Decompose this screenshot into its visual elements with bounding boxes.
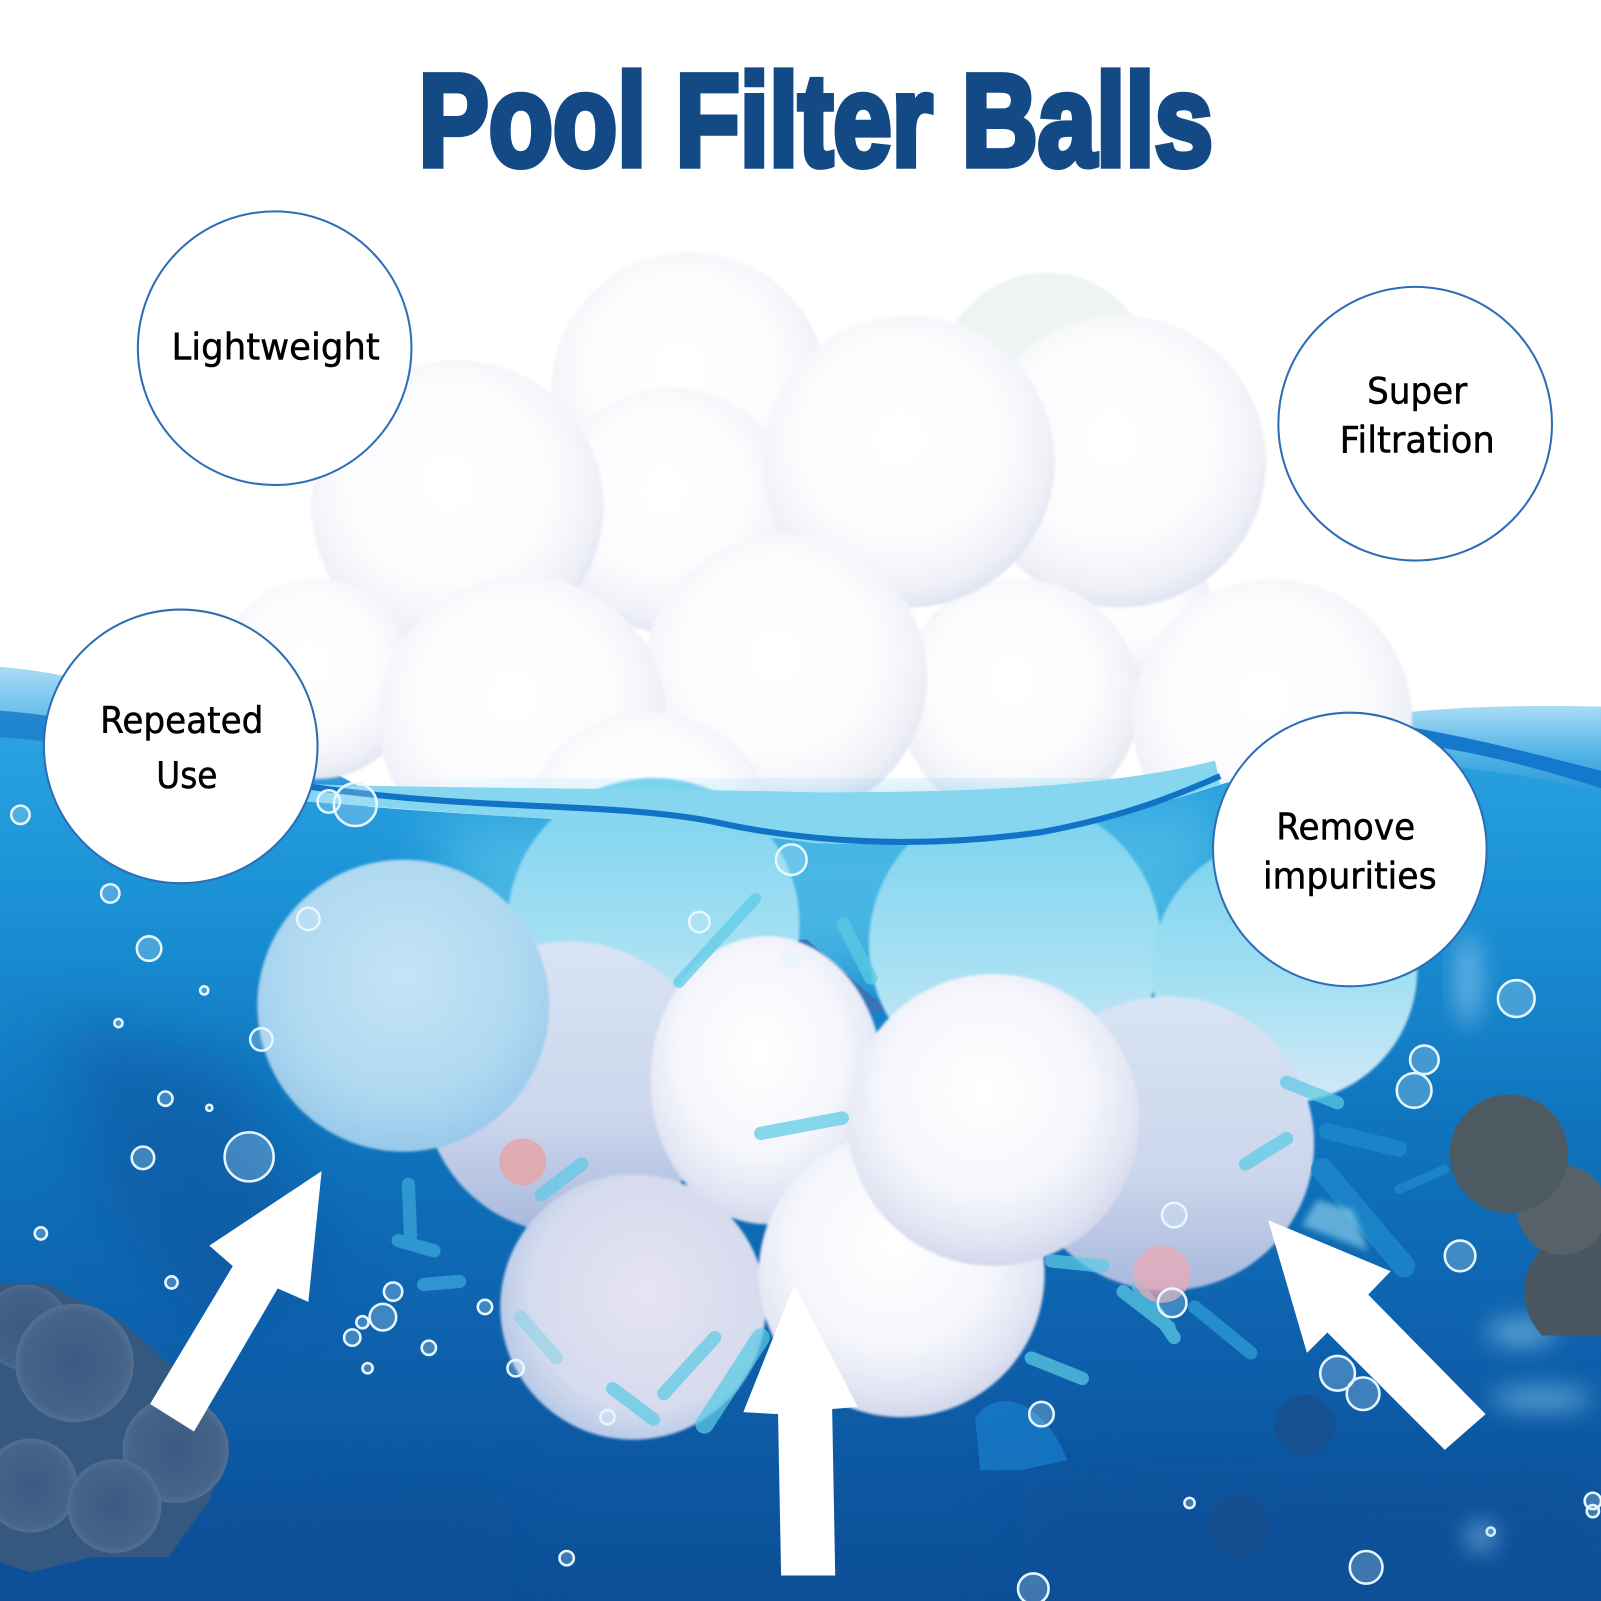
arrow: right <box>1268 1220 1486 1450</box>
dark gap between the submerged balls <box>633 939 888 1021</box>
callout: Remove impurities: impurities <box>1263 854 1437 897</box>
water back surface right <box>1215 706 1601 817</box>
submerged filter balls <box>257 778 1417 1440</box>
impurity rods <box>398 899 1338 1424</box>
bubbles <box>11 783 1601 1601</box>
underwater body <box>0 737 1601 1601</box>
left surface stripe <box>0 711 306 791</box>
pink impurity <box>499 1138 546 1185</box>
cyan glow under the surface <box>429 796 1225 980</box>
title: Pool Filter Balls <box>419 47 1213 193</box>
water back surface left <box>0 667 368 817</box>
callout: Super Filtration: Filtration <box>1340 418 1495 461</box>
callout: Repeated Use: Use <box>156 754 217 797</box>
dark water swathes <box>0 1021 1601 1601</box>
callout: Super Filtration: Super <box>1367 369 1468 412</box>
blue rods near right <box>1322 1131 1445 1266</box>
callout: Repeated Use <box>44 610 318 883</box>
bright impurity clump at lower right <box>1302 1200 1368 1251</box>
cyan surface band <box>306 761 1220 844</box>
callout: Lightweight: Lightweight <box>172 325 380 368</box>
callout: Remove impurities <box>1213 713 1487 986</box>
blue crescent shape <box>975 1401 1067 1470</box>
callout: Repeated Use: Repeated <box>100 699 263 742</box>
callout: Super Filtration <box>1278 287 1552 561</box>
arrow: left <box>150 1171 322 1432</box>
callout: Remove impurities: Remove <box>1276 805 1415 848</box>
dark surface line <box>306 776 1220 842</box>
dim bottom spheres <box>1208 1395 1336 1557</box>
dark dirty balls bottom left <box>0 1283 230 1572</box>
arrow: center <box>743 1284 858 1575</box>
callout: Lightweight <box>138 211 411 485</box>
floating filter balls above water <box>216 252 1412 967</box>
pink impurity right <box>1133 1246 1191 1303</box>
dark dirty balls right <box>1450 1095 1601 1355</box>
right surface stripe <box>1399 727 1601 788</box>
blurred light patches at right <box>1456 934 1593 1551</box>
